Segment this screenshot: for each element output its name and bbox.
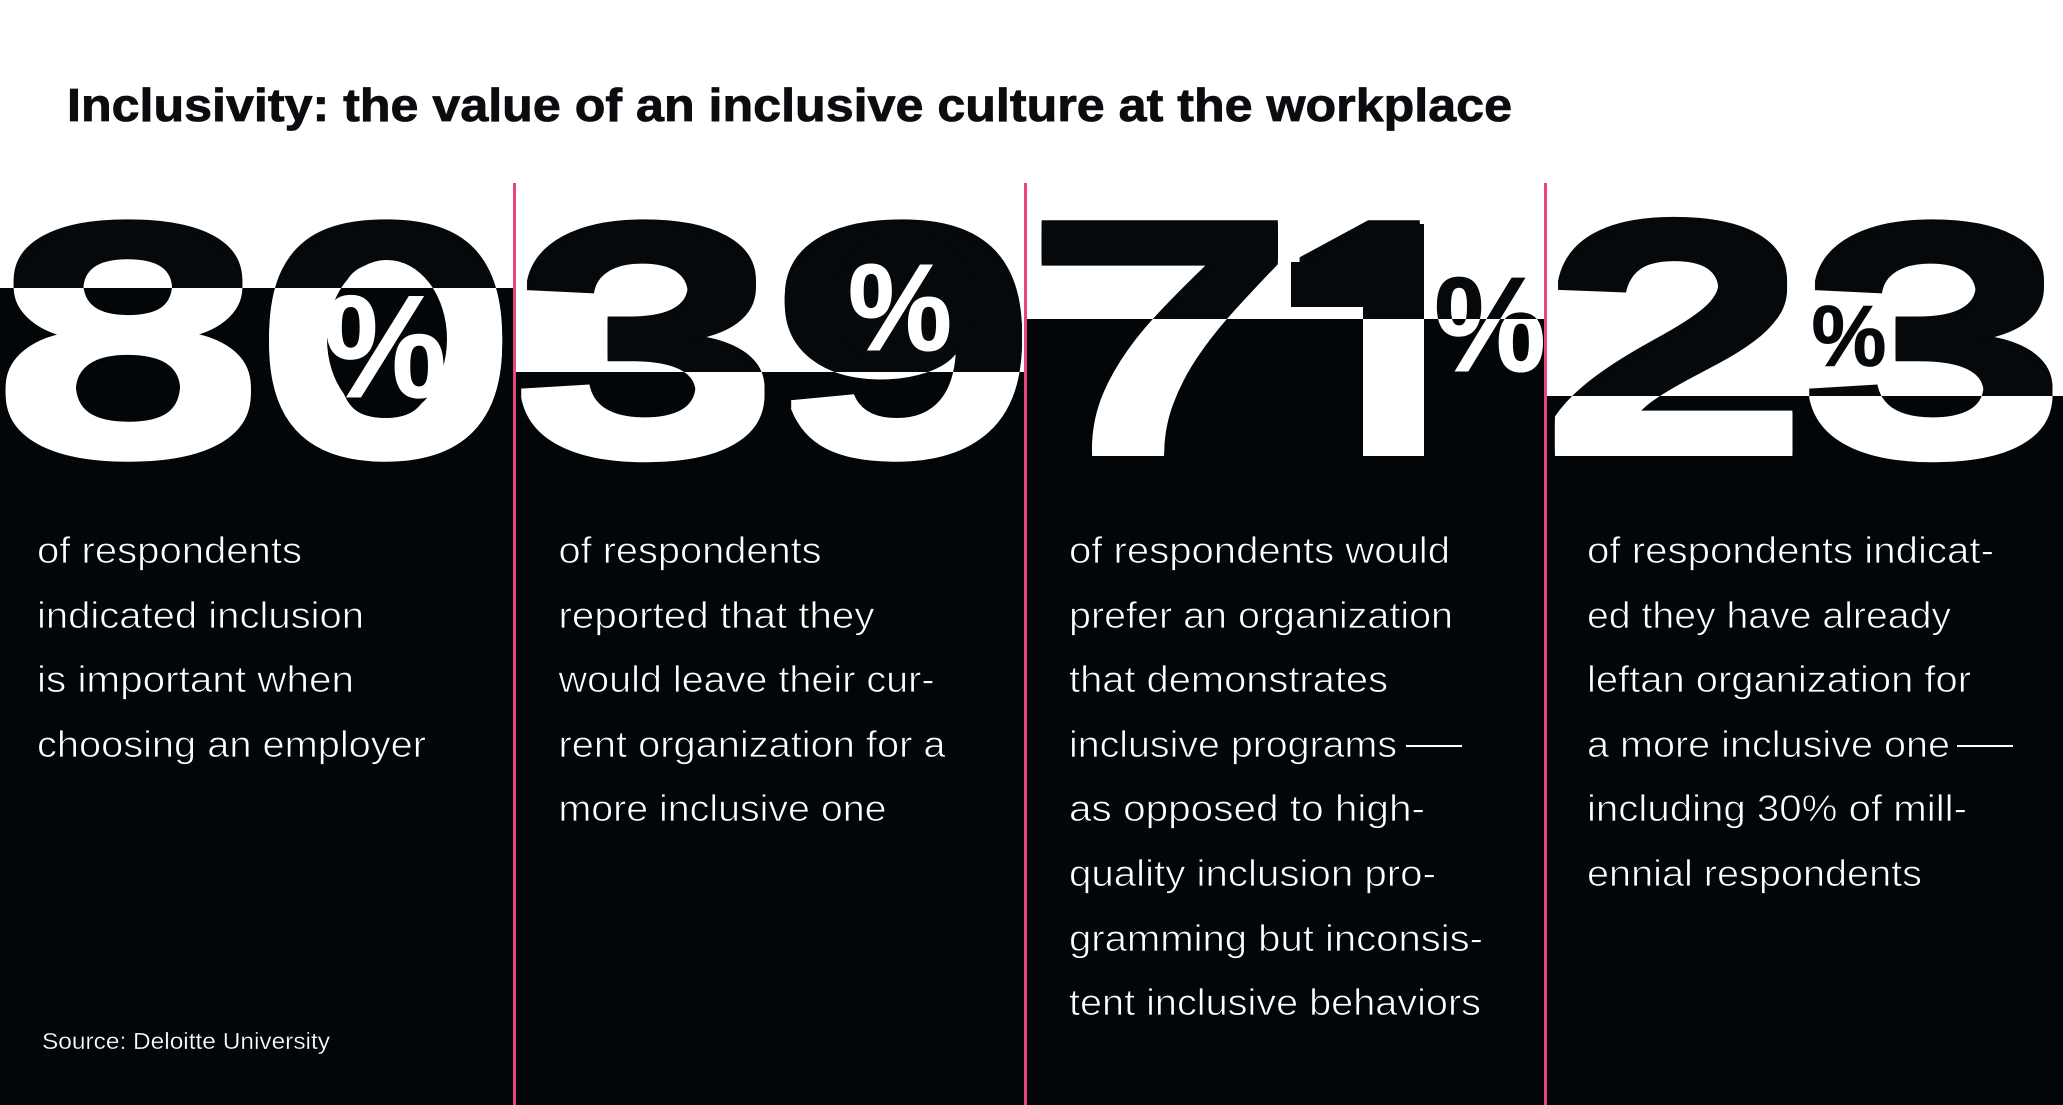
big number: 23: 3 bbox=[1798, 155, 2063, 525]
body text: is important when bbox=[37, 659, 354, 700]
big number: 39 bbox=[521, 219, 1022, 462]
body text: including 30% of mill- bbox=[1587, 788, 1967, 829]
body text: more inclusive one bbox=[558, 788, 886, 829]
body text: would leave their cur- bbox=[557, 659, 934, 700]
body text: of respondents indicat- bbox=[1587, 530, 1994, 571]
panel: 39 percent bbox=[516, 219, 1024, 1105]
body text: as opposed to high- bbox=[1069, 788, 1425, 829]
body text: ed they have already bbox=[1587, 595, 1952, 636]
body text: gramming but inconsis- bbox=[1069, 918, 1483, 959]
source note: Source: Deloitte University bbox=[42, 1028, 331, 1054]
big number: 39: 3 bbox=[510, 155, 782, 525]
body text: tent inclusive behaviors bbox=[1069, 982, 1481, 1023]
big number: 71: 7 bbox=[1020, 153, 1300, 523]
panel: 23 percent bbox=[1538, 153, 2063, 1105]
big number: 80: 0 bbox=[250, 155, 522, 525]
percent sign: % bbox=[1812, 289, 1886, 385]
panel background bbox=[0, 288, 513, 1105]
body text: of respondents would bbox=[1069, 530, 1450, 571]
body text: quality inclusion pro- bbox=[1069, 853, 1436, 894]
title: Inclusivity: the value of an inclusive culture at the workplace bbox=[67, 79, 1512, 131]
em dash bbox=[1957, 745, 2013, 747]
big number: 71 bbox=[1042, 220, 1424, 456]
big number: 71: 1 bbox=[1273, 153, 1493, 523]
body text: of respondents bbox=[37, 530, 302, 571]
body text: a more inclusive one bbox=[1587, 724, 1950, 765]
panel: 80 percent bbox=[0, 155, 522, 1105]
big number: 23: 3 bbox=[1798, 155, 2063, 525]
body text: of respondents bbox=[558, 530, 822, 571]
big number: 23: 2 bbox=[1538, 153, 1812, 523]
big number: 71: 7 bbox=[1020, 153, 1300, 523]
percent sign: % bbox=[1434, 249, 1546, 400]
panel: 71 percent bbox=[1020, 153, 1546, 1105]
body text: inclusive programs bbox=[1069, 724, 1397, 765]
body text bbox=[557, 530, 946, 829]
big number: 23 bbox=[1554, 216, 2052, 462]
body text bbox=[1069, 530, 1483, 1023]
big number: 39: 3 bbox=[510, 155, 782, 525]
big number: 23: 2 bbox=[1538, 153, 1812, 523]
body text: ennial respondents bbox=[1587, 853, 1922, 894]
body text: leftan organization for bbox=[1587, 659, 1971, 700]
big number: 39: 9 bbox=[768, 155, 1040, 525]
body text bbox=[1587, 530, 1994, 894]
em dash bbox=[1406, 745, 1462, 747]
column dividers bbox=[513, 183, 1547, 1105]
panel background bbox=[1027, 319, 1544, 1105]
body text: that demonstrates bbox=[1069, 659, 1388, 700]
body text: choosing an employer bbox=[37, 724, 426, 765]
big number: 80 bbox=[6, 219, 502, 462]
percent sign bbox=[1436, 276, 1543, 372]
big number: 39: 9 bbox=[768, 155, 1040, 525]
panel background bbox=[516, 372, 1025, 1105]
body text: prefer an organization bbox=[1069, 595, 1453, 636]
big number: 80: 0 bbox=[250, 155, 522, 525]
percent sign: % bbox=[323, 266, 447, 429]
body text: indicated inclusion bbox=[37, 595, 364, 636]
body text: rent organization for a bbox=[558, 724, 946, 765]
percent sign: % bbox=[1434, 249, 1546, 400]
percent sign: % bbox=[848, 239, 952, 377]
body text: reported that they bbox=[558, 595, 875, 636]
panel background bbox=[1547, 396, 2063, 1105]
body text bbox=[37, 530, 426, 765]
